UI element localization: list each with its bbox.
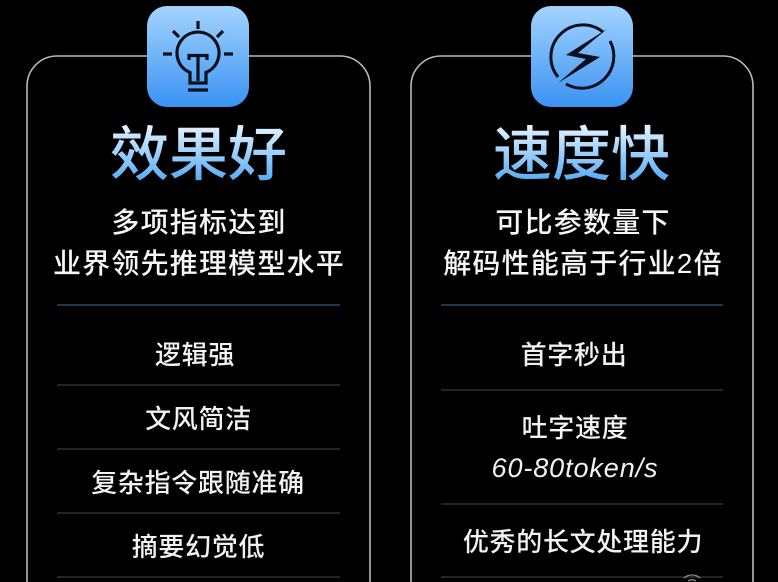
subtitle: speed line 2: 解码性能高于行业2倍 (443, 248, 723, 279)
item: hallucination: 摘要幻觉低 (132, 532, 265, 562)
panel: effect (27, 6, 370, 582)
item: long text: 优秀的长文处理能力 (463, 527, 703, 557)
icon: lightning (531, 6, 633, 107)
subtitle: effect line 1: 多项指标达到 (111, 207, 287, 238)
subtitle: speed line 1: 可比参数量下 (495, 207, 671, 238)
item: style: 文风简洁 (145, 404, 252, 434)
panel: speed (411, 6, 753, 582)
icon: watermark (684, 575, 700, 581)
item: token rate: 60-80token/s (492, 453, 658, 483)
item: instructions: 复杂指令跟随准确 (91, 468, 305, 498)
item: logic: 逻辑强 (155, 340, 235, 370)
item: token speed: 吐字速度 (522, 413, 628, 443)
heading: effect: 效果好 (110, 122, 287, 188)
heading: speed: 速度快 (493, 122, 670, 188)
subtitle: effect line 2: 业界领先推理模型水平 (53, 248, 345, 279)
item: first character: 首字秒出 (521, 340, 627, 370)
icon: light bulb (147, 6, 249, 107)
